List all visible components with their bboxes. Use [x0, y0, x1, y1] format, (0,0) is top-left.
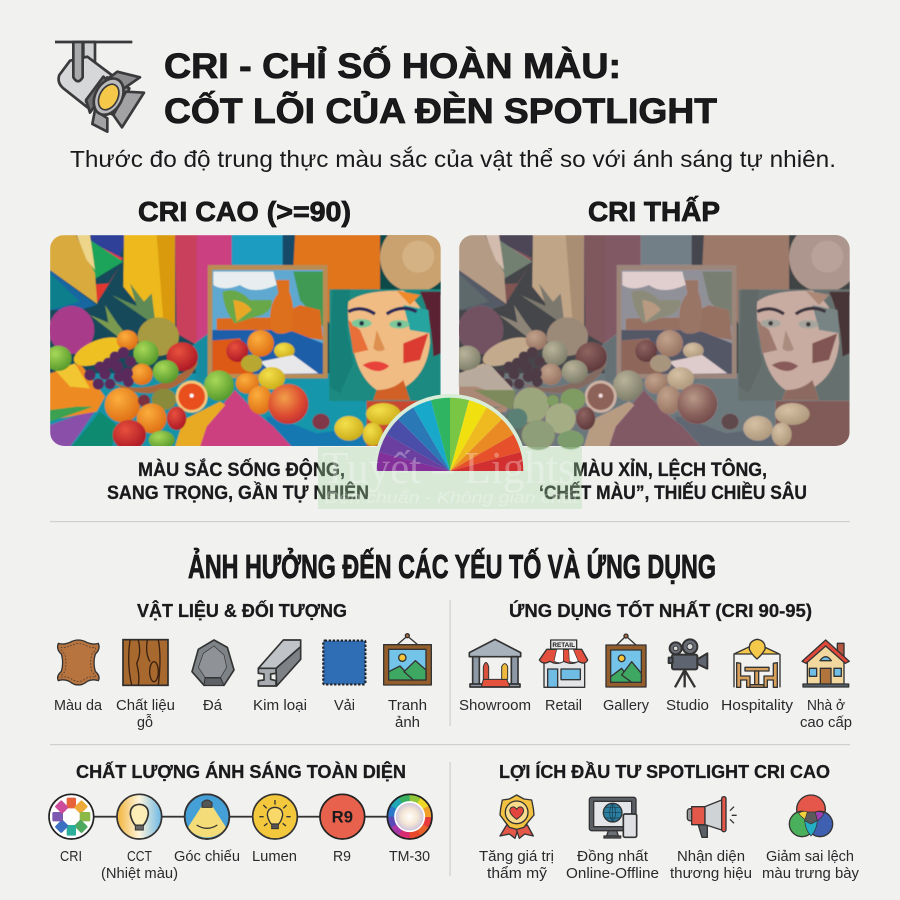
- labels: light quality: (Nhiệt màu): [101, 866, 178, 882]
- labels: materials: Kim loại: [253, 698, 307, 714]
- connector line: [71, 816, 410, 818]
- icon: lumen bulb: [253, 794, 297, 839]
- labels: materials: Đá: [203, 698, 223, 714]
- icon: gallery picture: [606, 634, 646, 687]
- labels: light quality: R9: [333, 849, 351, 865]
- panel: dull still life under low CRI: [454, 222, 859, 450]
- heading: light quality: CHẤT LƯỢNG ÁNH SÁNG TOÀN DIỆN: [76, 761, 406, 782]
- watermark panel: [318, 447, 582, 509]
- icon: hospitality: [734, 639, 780, 687]
- icon: metal beam: [258, 640, 301, 686]
- panel: vivid still life under high CRI: [45, 222, 450, 450]
- divider: [50, 521, 850, 522]
- labels: materials: Chất liệu: [116, 698, 175, 714]
- icon: TM-30 ring: [385, 792, 435, 842]
- labels: light quality: [60, 849, 430, 882]
- labels: benefits: màu trưng bày: [762, 866, 860, 882]
- title: CỐT LÕI CỦA ĐÈN SPOTLIGHT: [164, 91, 717, 131]
- icon: monitor and tablet: [589, 797, 637, 838]
- icon: house: [802, 640, 849, 687]
- labels: applications: [459, 698, 852, 731]
- labels: applications: Hospitality: [721, 698, 794, 714]
- heading: applications: ỨNG DỤNG TỐT NHẤT (CRI 90-95): [509, 600, 812, 621]
- panel: best applications: [459, 600, 852, 731]
- panel: materials and objects: [54, 600, 431, 731]
- column divider upper: [450, 600, 451, 726]
- labels: materials: Màu da: [54, 698, 103, 714]
- labels: light quality: CRI: [60, 849, 82, 865]
- labels: applications: Retail: [545, 698, 582, 714]
- icon: leather: [58, 640, 99, 685]
- labels: benefits: [479, 849, 860, 882]
- icon: showroom: [469, 639, 521, 687]
- labels: benefits: thương hiệu: [670, 866, 752, 882]
- panel: investment benefits: [479, 761, 860, 882]
- icon: beam angle: [185, 794, 229, 839]
- icon: retail: [539, 640, 588, 687]
- title: [164, 46, 717, 131]
- icon: framed picture: [384, 634, 431, 685]
- icon: retail: RETAIL: [552, 642, 575, 649]
- labels: applications: Gallery: [603, 698, 650, 714]
- icon: film camera: [669, 639, 707, 687]
- caption: low CRI: [539, 457, 807, 504]
- labels: applications: Studio: [666, 698, 709, 714]
- labels: benefits: thẩm mỹ: [487, 866, 548, 882]
- labels: light quality: TM-30: [389, 849, 430, 865]
- caption: high CRI: MÀU SẮC SỐNG ĐỘNG,: [138, 457, 345, 481]
- panel: muted green fruit overlay on low CRI photo: [459, 363, 585, 450]
- caption: high CRI: [107, 457, 369, 504]
- labels: benefits: Giảm sai lệch: [766, 849, 854, 865]
- labels: applications: Nhà ở: [807, 698, 845, 714]
- labels: materials: gỗ: [137, 714, 153, 731]
- icon: R9: R9: [332, 808, 353, 827]
- icon: R9: [320, 794, 365, 839]
- icon: megaphone: [687, 797, 737, 837]
- colour spectrum semicircle: [373, 394, 527, 471]
- caption: high CRI: SANG TRỌNG, GẦN TỰ NHIÊN: [107, 480, 369, 504]
- icon: spotlight: [55, 42, 144, 132]
- labels: benefits: Tăng giá trị: [479, 849, 554, 865]
- icon: fabric: [323, 641, 365, 684]
- labels: light quality: Góc chiếu: [174, 849, 240, 865]
- heading: low CRI: CRI THẤP: [588, 196, 720, 227]
- heading: materials: VẬT LIỆU & ĐỐI TƯỢNG: [137, 600, 347, 621]
- heading: benefits: LỢI ÍCH ĐẦU TƯ SPOTLIGHT CRI CAO: [499, 761, 830, 782]
- icon: colour overlap: [789, 795, 833, 837]
- labels: applications: Showroom: [459, 698, 531, 714]
- icon: CCT bulb: [117, 794, 162, 839]
- labels: benefits: Online-Offline: [566, 866, 659, 882]
- labels: benefits: Nhận diện: [677, 849, 745, 865]
- labels: light quality: Lumen: [252, 849, 297, 865]
- divider: [50, 744, 850, 745]
- title: CRI - CHỈ SỐ HOÀN MÀU:: [164, 46, 621, 86]
- caption: low CRI: ‘CHẾT MÀU”, THIẾU CHIỀU SÂU: [539, 480, 807, 504]
- icon: wood: [123, 640, 168, 685]
- labels: light quality: CCT: [127, 849, 152, 865]
- labels: materials: Tranh: [388, 698, 427, 714]
- labels: materials: ảnh: [395, 715, 420, 731]
- caption: low CRI: MÀU XỈN, LỆCH TÔNG,: [573, 457, 767, 481]
- labels: materials: [54, 698, 427, 731]
- labels: applications: cao cấp: [800, 715, 852, 731]
- icon: award ribbon: [500, 795, 534, 838]
- panel: overall light quality: [49, 761, 435, 882]
- icon: stone: [192, 640, 234, 685]
- labels: benefits: Đồng nhất: [577, 849, 648, 865]
- subtitle: Thước đo độ trung thực màu sắc của vật thể so với ánh sáng tự nhiên.: [70, 146, 836, 172]
- column divider lower: [450, 762, 451, 876]
- watermark text: Tuyết – Lights: [322, 442, 575, 493]
- watermark text: Đèn chuẩn - Không gian chất: [325, 488, 579, 507]
- labels: materials: Vải: [334, 698, 355, 714]
- heading: high CRI: CRI CAO (>=90): [138, 196, 351, 227]
- icon: CRI colour wheel: [49, 794, 94, 839]
